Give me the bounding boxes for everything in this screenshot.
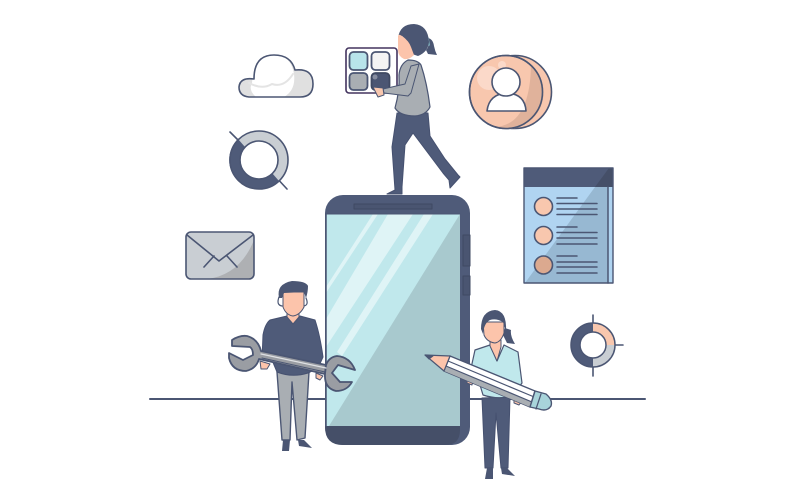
- icon: document list: [524, 168, 613, 283]
- shirt: [468, 345, 522, 398]
- icon: cloud: [239, 55, 313, 97]
- neck: [490, 340, 501, 361]
- list item one: [534, 198, 597, 216]
- torso: [395, 60, 430, 116]
- hands: [260, 361, 323, 380]
- ponytail: [426, 38, 437, 55]
- icon: wrench: [229, 336, 355, 391]
- icon: smartphone: [325, 195, 470, 445]
- figure: woman walking with app grid: [346, 24, 460, 194]
- face: [398, 35, 414, 59]
- ears and neck: [278, 297, 307, 306]
- icon: donut chart right: [571, 315, 623, 376]
- legs: [387, 113, 460, 194]
- ponytail: [503, 328, 515, 344]
- trousers: [277, 372, 309, 440]
- icon: donut chart left: [229, 131, 288, 189]
- trousers: [482, 397, 510, 468]
- ground line: [150, 398, 645, 400]
- list item three: [534, 256, 597, 274]
- figure: man with wrench: [229, 281, 355, 451]
- shoes: [282, 440, 312, 451]
- icon: pencil: [425, 355, 551, 410]
- arm and hand: [383, 64, 419, 96]
- head: [283, 292, 304, 316]
- hair: [279, 281, 308, 298]
- figure: woman with pencil: [425, 310, 551, 479]
- hands: [467, 378, 522, 405]
- list item two: [534, 226, 597, 244]
- icon: profile coin: [470, 56, 552, 129]
- hair: [481, 310, 506, 334]
- shoes: [485, 468, 515, 479]
- hair: [398, 24, 429, 56]
- face: [483, 322, 504, 343]
- sweater: [262, 316, 323, 375]
- icon: app grid: [346, 48, 397, 93]
- icon: envelope: [186, 232, 254, 279]
